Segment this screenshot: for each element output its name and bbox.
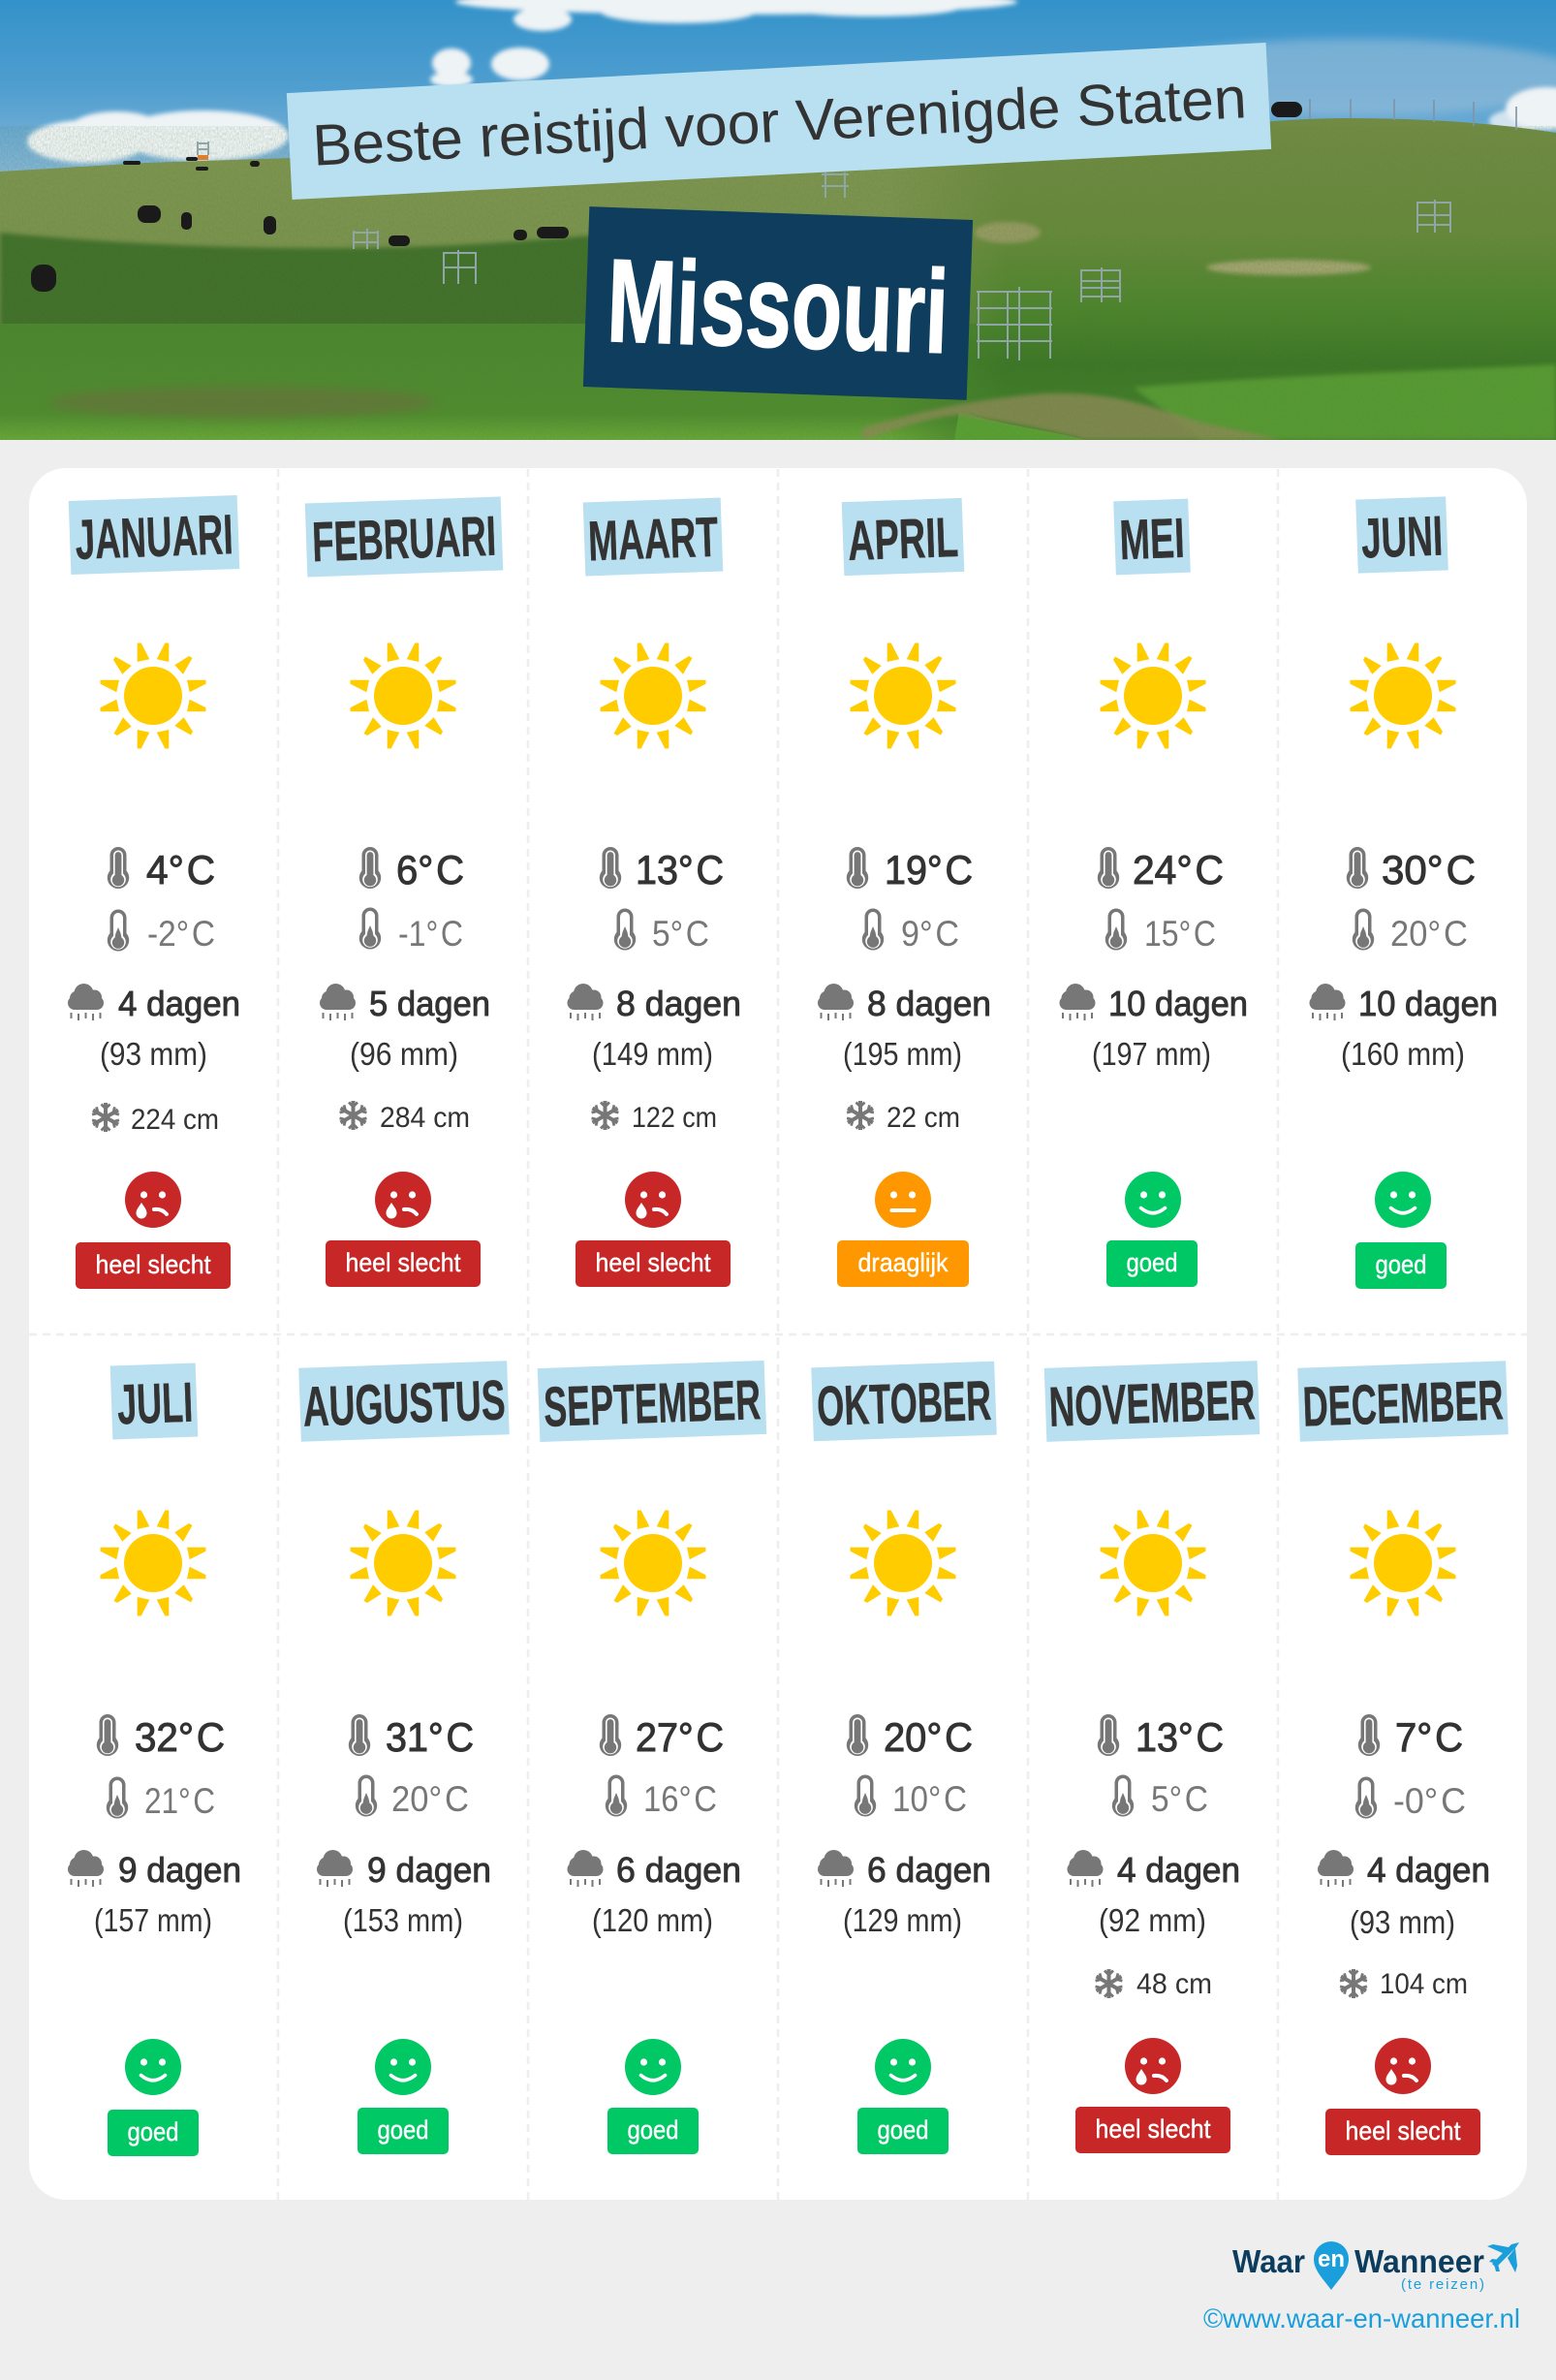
heading: februari — [305, 496, 503, 578]
heading: maart: MAART — [587, 506, 719, 573]
max temperature: 20°C — [884, 1714, 973, 1760]
logo: Waar en Wanneer: Waar — [1232, 2243, 1305, 2279]
rating label: goed — [628, 2115, 678, 2145]
icon: sun — [601, 1510, 705, 1616]
rainfall: (120 mm) — [592, 1902, 713, 1938]
min temperature: 15°C — [1144, 914, 1216, 954]
rating face — [1125, 2038, 1181, 2094]
hero photo: pasture with cattle — [0, 0, 1556, 444]
heading: oktober: OKTOBER — [816, 1369, 992, 1438]
heading: april: APRIL — [847, 506, 959, 573]
rain days: 10 dagen — [1358, 984, 1498, 1023]
min temperature — [1355, 1777, 1466, 1821]
heading: september — [538, 1361, 766, 1442]
rainfall: (93 mm) — [1350, 1904, 1455, 1940]
rating face — [125, 1172, 181, 1228]
min temperature — [1105, 909, 1216, 954]
max temperature — [108, 847, 215, 892]
rating label: heel slecht — [95, 1250, 211, 1279]
rain days: 4 dagen — [1117, 1850, 1240, 1890]
heading: juli — [110, 1362, 198, 1440]
icon: sun — [101, 643, 205, 748]
rating label — [837, 1240, 969, 1287]
rating label — [857, 2108, 949, 2154]
rating label: heel slecht — [1095, 2114, 1211, 2144]
max temperature: 7°C — [1395, 1714, 1463, 1760]
rating label: draaglijk — [858, 1248, 949, 1277]
website credit: ©www.waar-en-wanneer.nl — [1203, 2303, 1520, 2333]
rating label: heel slecht — [1345, 2116, 1461, 2145]
rating label — [1075, 2107, 1230, 2153]
rating label — [358, 2108, 449, 2154]
heading: januari: JANUARI — [75, 503, 234, 572]
heading: april — [842, 498, 964, 576]
max temperature: 27°C — [636, 1714, 724, 1760]
rating label: heel slecht — [345, 1248, 461, 1277]
snowfall — [1339, 1968, 1468, 2000]
min temperature — [356, 1775, 469, 1819]
rating face — [375, 2039, 431, 2095]
heading: augustus: AUGUSTUS — [302, 1368, 507, 1439]
min temperature — [614, 909, 709, 954]
max temperature — [600, 847, 724, 892]
snowfall: 22 cm — [887, 1102, 960, 1134]
rainfall: (197 mm) — [1092, 1036, 1211, 1072]
heading: mei: MEI — [1118, 507, 1186, 572]
max temperature — [847, 1714, 973, 1760]
rating label: goed — [128, 2117, 178, 2146]
min temperature — [107, 1777, 215, 1821]
min temperature — [855, 1775, 967, 1819]
rainfall: (92 mm) — [1099, 1902, 1206, 1938]
heading: oktober — [811, 1362, 997, 1441]
title banner: Beste reistijd voor Verenigde Staten — [311, 65, 1248, 178]
min temperature: -1°C — [398, 914, 463, 954]
min temperature — [359, 907, 463, 954]
icon: sun — [351, 643, 455, 748]
rating face — [1125, 1172, 1181, 1228]
snowfall — [1094, 1968, 1212, 2000]
icon: sun — [1101, 643, 1205, 748]
max temperature: 31°C — [386, 1714, 474, 1760]
rainfall: (157 mm) — [94, 1902, 212, 1938]
min temperature — [108, 909, 215, 954]
rain days: 5 dagen — [369, 984, 490, 1023]
rainfall: (96 mm) — [350, 1036, 458, 1072]
heading: juni: JUNI — [1360, 505, 1444, 570]
heading: februari: FEBRUARI — [311, 505, 497, 574]
rain days — [1068, 1850, 1240, 1890]
month: november — [1044, 1361, 1260, 2153]
max temperature — [97, 1714, 225, 1760]
min temperature: 9°C — [901, 914, 959, 954]
icon: sun — [101, 1510, 205, 1616]
month: oktober — [811, 1362, 997, 2154]
max temperature — [1098, 1714, 1224, 1760]
rainfall: (93 mm) — [100, 1036, 207, 1072]
month: april — [818, 498, 991, 1287]
min temperature: 5°C — [1151, 1779, 1208, 1819]
heading: november — [1044, 1361, 1260, 1442]
month: augustus — [298, 1361, 510, 2154]
rating face — [1375, 1172, 1431, 1228]
rain days: 10 dagen — [1108, 984, 1248, 1023]
snowfall: 122 cm — [632, 1102, 717, 1134]
rain days — [320, 984, 490, 1023]
rain days: 6 dagen — [867, 1850, 991, 1890]
rating label — [108, 2110, 199, 2156]
min temperature: -0°C — [1393, 1781, 1466, 1821]
heading: november: NOVEMBER — [1048, 1368, 1257, 1439]
rating label: goed — [1126, 1248, 1178, 1277]
heading: juni — [1355, 496, 1448, 574]
icon: sun — [851, 643, 955, 748]
rating label: goed — [1376, 1250, 1426, 1279]
max temperature: 19°C — [885, 847, 973, 892]
max temperature: 30°C — [1382, 847, 1476, 892]
heading: augustus — [298, 1361, 510, 1442]
rating label — [1355, 1242, 1447, 1289]
rating label — [607, 2108, 699, 2154]
snowfall — [91, 1103, 219, 1136]
month: februari — [305, 496, 503, 1287]
logo: Waar en Wanneer — [1232, 2241, 1519, 2293]
month: mei — [1060, 499, 1248, 1287]
rain days — [68, 984, 240, 1023]
heading: juli: JULI — [116, 1371, 194, 1436]
rating face — [1375, 2038, 1431, 2094]
min temperature: -2°C — [147, 914, 215, 954]
rain days — [68, 1850, 241, 1890]
location banner: Missouri: Missouri — [606, 235, 950, 378]
rating label — [76, 1242, 231, 1289]
rating label: heel slecht — [595, 1248, 711, 1277]
rating face — [125, 2039, 181, 2095]
max temperature — [600, 1714, 724, 1760]
max temperature: 13°C — [1136, 1714, 1224, 1760]
max temperature: 4°C — [146, 847, 215, 892]
rainfall: (160 mm) — [1341, 1036, 1465, 1072]
rain days: 6 dagen — [616, 1850, 741, 1890]
logo: Waar en Wanneer: (te reizen) — [1401, 2276, 1484, 2293]
heading: september: SEPTEMBER — [543, 1368, 762, 1439]
title banner — [287, 43, 1271, 200]
rain days: 9 dagen — [118, 1850, 241, 1890]
location banner: Missouri — [583, 206, 973, 400]
rating label — [1325, 2109, 1480, 2155]
icon: sun — [1101, 1510, 1205, 1616]
rating label: goed — [378, 2115, 428, 2145]
icon: map pin — [1314, 2241, 1349, 2290]
month: juni — [1310, 496, 1498, 1289]
rating face — [375, 1172, 431, 1228]
icon: sun — [851, 1510, 955, 1616]
max temperature — [349, 1714, 474, 1760]
min temperature: 10°C — [892, 1779, 967, 1819]
max temperature: 13°C — [636, 847, 724, 892]
min temperature — [606, 1775, 717, 1819]
max temperature — [359, 847, 464, 892]
snowfall: 284 cm — [380, 1102, 470, 1134]
month: september — [538, 1361, 766, 2154]
snowfall: 224 cm — [131, 1104, 219, 1136]
max temperature — [847, 847, 973, 892]
heading: maart — [583, 498, 723, 576]
rating label — [1106, 1240, 1198, 1287]
snowfall: 104 cm — [1380, 1968, 1468, 2000]
max temperature: 32°C — [135, 1714, 225, 1760]
rain days: 8 dagen — [616, 984, 741, 1023]
logo: Waar en Wanneer: Wanneer — [1354, 2243, 1484, 2279]
month: juli — [68, 1362, 241, 2156]
min temperature — [1112, 1775, 1208, 1819]
icon: sun — [1351, 1510, 1455, 1616]
snowfall — [338, 1101, 470, 1134]
min temperature: 20°C — [1390, 914, 1468, 954]
min temperature: 16°C — [643, 1779, 717, 1819]
max temperature: 6°C — [396, 847, 464, 892]
icon: sun — [601, 643, 705, 748]
rain days: 4 dagen — [118, 984, 240, 1023]
heading: mei — [1113, 499, 1191, 575]
rating label — [326, 1240, 481, 1287]
rainfall: (153 mm) — [343, 1902, 463, 1938]
rainfall: (149 mm) — [592, 1036, 713, 1072]
icon: map pin: en — [1318, 2246, 1345, 2272]
min temperature — [862, 909, 959, 954]
rating label: goed — [878, 2115, 928, 2145]
icon: sun — [351, 1510, 455, 1616]
min temperature — [1353, 909, 1468, 954]
snowfall: 48 cm — [1136, 1968, 1212, 2000]
month: januari — [68, 495, 240, 1289]
rain days: 4 dagen — [1367, 1850, 1490, 1890]
month: maart — [568, 498, 741, 1287]
rating face — [625, 1172, 681, 1228]
rainfall: (129 mm) — [843, 1902, 962, 1938]
max temperature — [1358, 1714, 1463, 1760]
icon: sun — [1351, 643, 1455, 748]
min temperature: 20°C — [391, 1779, 469, 1819]
month: december — [1297, 1361, 1509, 2155]
snowfall — [590, 1101, 717, 1134]
heading: januari — [69, 495, 239, 575]
min temperature: 5°C — [652, 914, 709, 954]
rainfall: (195 mm) — [843, 1036, 962, 1072]
min temperature: 21°C — [144, 1781, 215, 1821]
rating face — [875, 2039, 931, 2095]
rating label — [576, 1240, 731, 1287]
icon: airplane — [1487, 2242, 1519, 2272]
rating face — [625, 2039, 681, 2095]
rating face — [875, 1172, 931, 1228]
rain days: 9 dagen — [367, 1850, 491, 1890]
snowfall — [846, 1101, 960, 1134]
rain days: 8 dagen — [867, 984, 991, 1023]
max temperature: 24°C — [1133, 847, 1224, 892]
panel: monthly climate table — [29, 468, 1527, 2200]
